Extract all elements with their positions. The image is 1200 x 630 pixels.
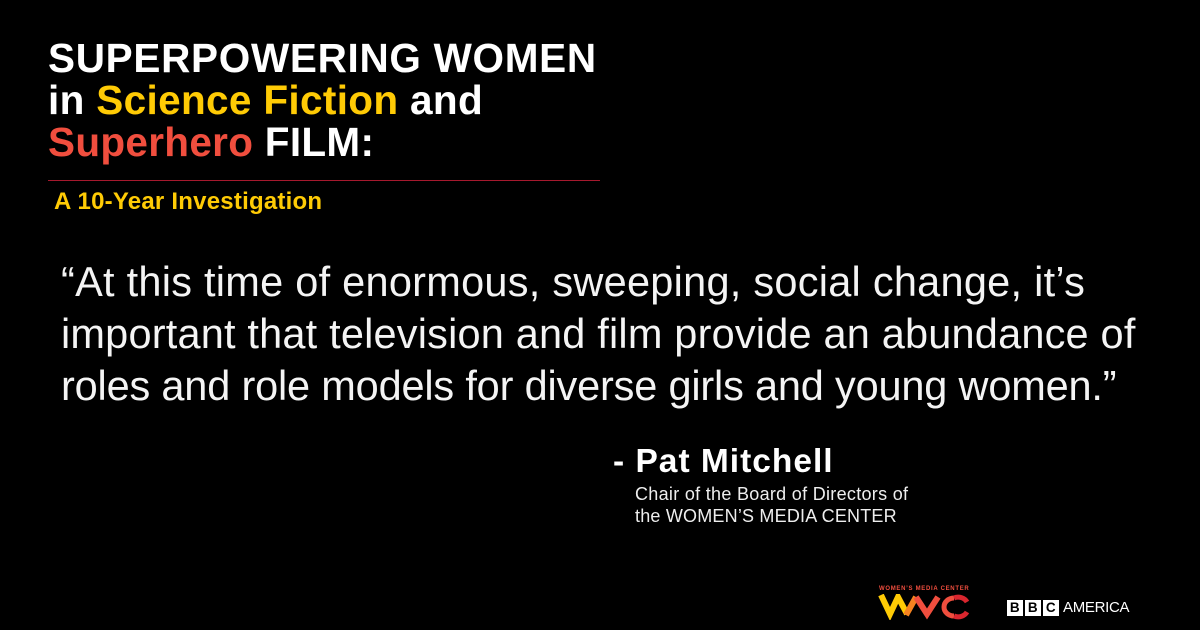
logo: Women's Media Center: WOMEN’S MEDIA CENTER — [879, 586, 969, 592]
title: Superhero FILM: — [48, 119, 374, 165]
quote: roles and role models for diverse girls and young women.” — [61, 362, 1116, 409]
quote — [61, 258, 1136, 409]
attribution role — [635, 484, 908, 526]
logo: BBC America — [1007, 599, 1130, 616]
title divider — [48, 180, 600, 181]
quote: “At this time of enormous, sweeping, social change, it’s — [61, 258, 1085, 305]
title: SUPERPOWERING WOMEN — [48, 35, 597, 81]
logo: BBC America: C — [1046, 600, 1056, 615]
subtitle: A 10-Year Investigation — [54, 188, 322, 215]
title — [48, 35, 597, 165]
attribution role: the WOMEN’S MEDIA CENTER — [635, 506, 897, 526]
logo: BBC America: AMERICA — [1063, 599, 1129, 616]
attribution name: - Pat Mitchell — [613, 443, 834, 480]
quote: important that television and film provide an abundance of — [61, 310, 1136, 357]
title: in Science Fiction and — [48, 77, 483, 123]
logo: Women's Media Center — [878, 586, 970, 620]
logo: BBC America: B — [1010, 600, 1020, 615]
logo: BBC America: B — [1028, 600, 1038, 615]
attribution role: Chair of the Board of Directors of — [635, 484, 908, 504]
